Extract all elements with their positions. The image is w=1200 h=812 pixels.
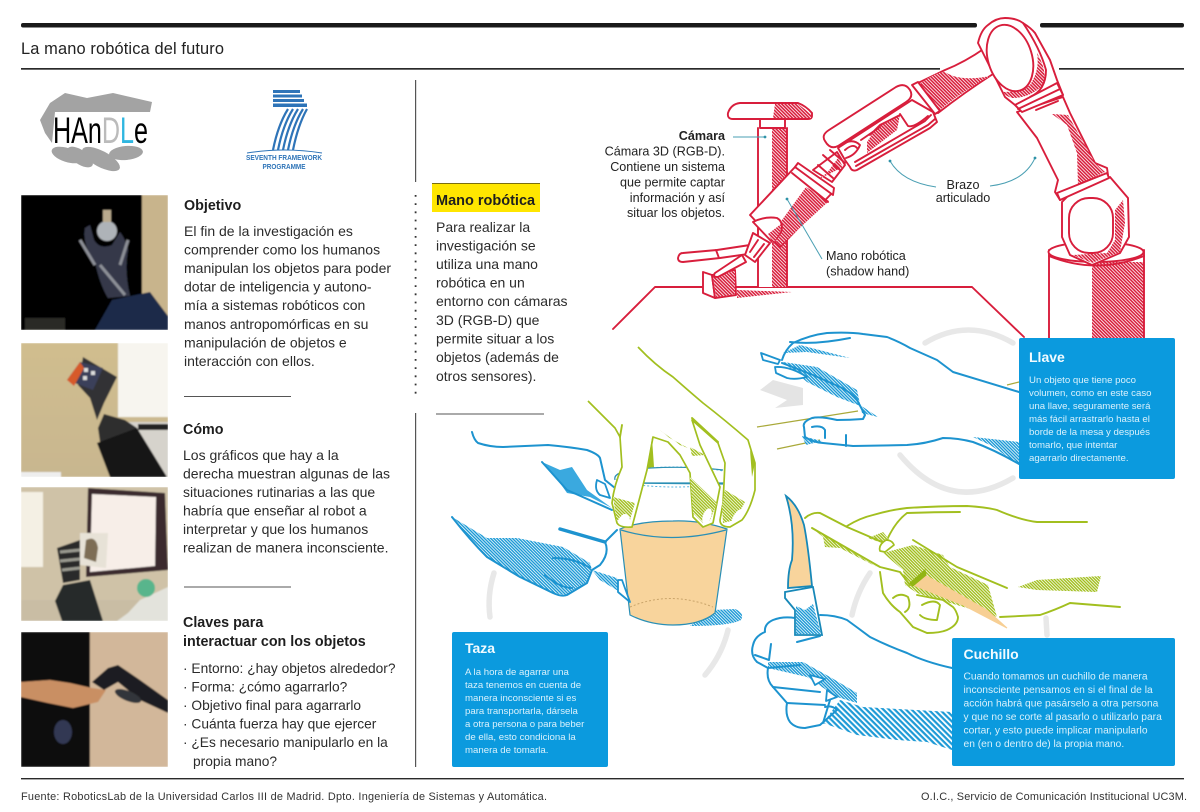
callout: llave: Un objeto que tiene poco xyxy=(1029,375,1136,386)
text block: objetivo: dotar de inteligencia y autono- xyxy=(184,278,372,294)
label: camara xyxy=(605,129,766,220)
callout: cuchillo: acción habrá que pasárselo a otra persona xyxy=(964,698,1159,710)
callout: llave xyxy=(1019,338,1175,479)
robot fingers xyxy=(678,233,770,277)
footer: O.I.C., Servicio de Comunicación Institucional UC3M. xyxy=(921,791,1187,803)
heading: objetivo: Objetivo xyxy=(184,198,241,214)
text block: como: habría que enseñar al robot a xyxy=(183,502,367,518)
panel: claves xyxy=(183,615,399,769)
text block: objetivo: manipulación de objetos e xyxy=(184,334,347,350)
panel: mano robotica xyxy=(432,183,571,384)
callout: taza: taza tenemos en cuenta de xyxy=(465,680,581,691)
table lines xyxy=(757,382,1019,449)
illustration: cup grip xyxy=(452,347,755,626)
top joint xyxy=(978,18,1063,112)
callout: taza: manera inconsciente si es xyxy=(465,693,576,704)
blue hand xyxy=(452,432,630,602)
callout: taza: Taza xyxy=(465,640,495,656)
text block: mano robotica: objetos (además de xyxy=(436,349,559,365)
text block: objetivo: El fin de la investigación es xyxy=(184,223,353,239)
logo: Seventh Framework Programme: PROGRAMME xyxy=(262,162,306,171)
text block: mano robotica: Para realizar la xyxy=(436,219,530,235)
text block: mano robotica: otros sensores). xyxy=(436,368,536,384)
upper arm xyxy=(1015,83,1108,200)
callout: llave: más fácil arrastrarlo hasta el xyxy=(1029,414,1150,425)
top rule and title band xyxy=(21,23,1184,70)
logo: Handle: HAnDLe xyxy=(53,110,148,151)
callout: llave: borde de la mesa y después xyxy=(1029,427,1150,438)
label: camara: Cámara xyxy=(679,129,726,143)
callout: taza: para transportarla, dársela xyxy=(465,706,579,717)
list: claves: · Objetivo final para agarrarlo xyxy=(183,698,361,713)
callout: llave: agarrarlo directamente. xyxy=(1029,453,1129,464)
vertical divider xyxy=(415,80,416,767)
logo: Seventh Framework Programme: SEVENTH FRAMEWORK xyxy=(246,153,322,162)
neck flare and elbow xyxy=(912,48,993,114)
callout: llave: una llave, seguramente será xyxy=(1029,401,1151,412)
label: brazo articulado: Brazo xyxy=(947,178,979,192)
label: mano robotica shadow hand xyxy=(786,198,909,278)
text block: objetivo: manos antropomórficas en su xyxy=(184,316,368,332)
label: camara: situar los objetos. xyxy=(627,206,725,220)
heading: mano robotica xyxy=(432,183,540,212)
heading: claves: interactuar con los objetos xyxy=(183,634,366,650)
heading: claves: Claves para xyxy=(183,615,264,631)
text block: objetivo: mía a sistemas robóticos con xyxy=(184,297,365,313)
text block: mano robotica: robótica en un xyxy=(436,274,525,290)
logo: Seventh Framework Programme xyxy=(246,90,322,171)
green hand xyxy=(588,347,755,527)
callout: cuchillo: Cuando tomamos un cuchillo de manera xyxy=(964,672,1148,682)
glass rim xyxy=(615,467,735,487)
lower joint xyxy=(1057,173,1129,265)
icon: gray arrow xyxy=(760,380,803,408)
label: brazo articulado: articulado xyxy=(936,191,990,205)
text block: mano robotica: 3D (RGB-D) que xyxy=(436,312,540,328)
list: claves: · Forma: ¿cómo agarrarlo? xyxy=(183,680,348,694)
text block: objetivo: interacción con ellos. xyxy=(184,353,315,369)
key xyxy=(761,353,807,379)
robot wrist lower link xyxy=(838,100,937,171)
base xyxy=(1048,242,1144,339)
table edge xyxy=(613,287,1024,337)
callout: taza: A la hora de agarrar una xyxy=(465,667,569,678)
panel: como xyxy=(183,422,394,556)
callout: taza: de ella, esto condiciona la xyxy=(465,732,576,743)
footer xyxy=(21,778,1187,803)
text block: como: realizan de manera inconsciente. xyxy=(183,540,388,556)
knife xyxy=(785,496,822,635)
photo: robot hand holding a mug xyxy=(21,487,168,621)
callout: llave: tomarlo, que intentar xyxy=(1029,440,1118,451)
label: brazo articulado xyxy=(889,157,1036,205)
cup shadow xyxy=(690,609,742,626)
label: mano robotica shadow hand: Mano robótica xyxy=(826,249,906,263)
gray circle arcs xyxy=(489,330,1047,675)
blue hand xyxy=(752,615,952,750)
hand hatching xyxy=(783,345,1019,464)
callout: cuchillo: Cuchillo xyxy=(964,646,1019,662)
robot wrist cylinder xyxy=(750,163,834,247)
callout: cuchillo: en (en o dentro de) la propia mano. xyxy=(964,739,1124,750)
callout: cuchillo xyxy=(952,638,1175,766)
camera on stand xyxy=(728,103,812,287)
photo: human hand and robot hand xyxy=(21,632,168,767)
label: camara: Cámara 3D (RGB-D). xyxy=(605,144,725,158)
photo: robot hand holding a light bulb xyxy=(21,195,168,330)
text block: como: interpretar y que los humanos xyxy=(183,521,368,537)
photo: robot hand holding a Rubik cube xyxy=(21,343,168,477)
illustration: key grip xyxy=(757,333,1019,464)
callout: llave: Llave xyxy=(1029,349,1065,365)
text block: mano robotica: entorno con cámaras xyxy=(436,293,568,309)
label: camara: Contiene un sistema xyxy=(610,160,725,174)
text block: mano robotica: investigación se xyxy=(436,238,536,254)
text block: como: Los gráficos que hay a la xyxy=(183,447,339,463)
callout: taza: manera de tomarla. xyxy=(465,745,548,756)
heading: mano robotica: Mano robótica xyxy=(436,193,536,209)
green hand xyxy=(805,506,1120,633)
text block: mano robotica: utiliza una mano xyxy=(436,256,538,272)
title: La mano robótica del futuro xyxy=(21,40,224,58)
label: camara: que permite captar xyxy=(620,176,725,190)
illustration: robot arm xyxy=(613,18,1144,339)
callout: llave: volumen, como en este caso xyxy=(1029,388,1152,399)
text block: mano robotica: permite situar a los xyxy=(436,330,554,346)
list: claves: propia mano? xyxy=(193,754,277,769)
list: claves: · Cuánta fuerza hay que ejercer xyxy=(183,716,377,732)
green right hatch xyxy=(1018,576,1101,592)
text block: objetivo: manipulan los objetos para poder xyxy=(184,260,391,276)
label: mano robotica shadow hand: (shadow hand) xyxy=(826,264,909,278)
hand outline xyxy=(782,333,1019,392)
callout: cuchillo: inconsciente pensamos en si el final de la xyxy=(964,685,1153,696)
callout: taza xyxy=(452,632,608,767)
panel: objetivo xyxy=(184,198,395,369)
footer: Fuente: RoboticsLab de la Universidad Carlos III de Madrid. Dpto. Ingeniería de Sistemas y Automática. xyxy=(21,791,547,803)
illustration: knife grip xyxy=(752,496,1120,750)
logo: Handle xyxy=(40,93,152,176)
callout: taza: a otra persona o para beber xyxy=(465,719,585,730)
list: claves: · ¿Es necesario manipularlo en la xyxy=(183,735,388,750)
text block: como: derecha muestran algunas de las xyxy=(183,466,390,482)
callout: cuchillo: cortar, y esto puede implicar manipularlo xyxy=(964,726,1148,736)
wrist neck xyxy=(813,150,845,182)
text block: objetivo: comprender como los humanos xyxy=(184,242,380,258)
callout: cuchillo: y que no se corte al pasarlo o utilizarlo para xyxy=(964,712,1162,723)
cup body xyxy=(620,521,727,625)
object cube xyxy=(703,270,792,298)
text block: como: situaciones rutinarias a las que xyxy=(183,484,375,500)
upper forearm capsule xyxy=(824,85,911,147)
label: camara: información y así xyxy=(630,191,725,205)
list: claves: · Entorno: ¿hay objetos alrededor? xyxy=(183,661,396,676)
heading: como: Cómo xyxy=(183,422,224,438)
